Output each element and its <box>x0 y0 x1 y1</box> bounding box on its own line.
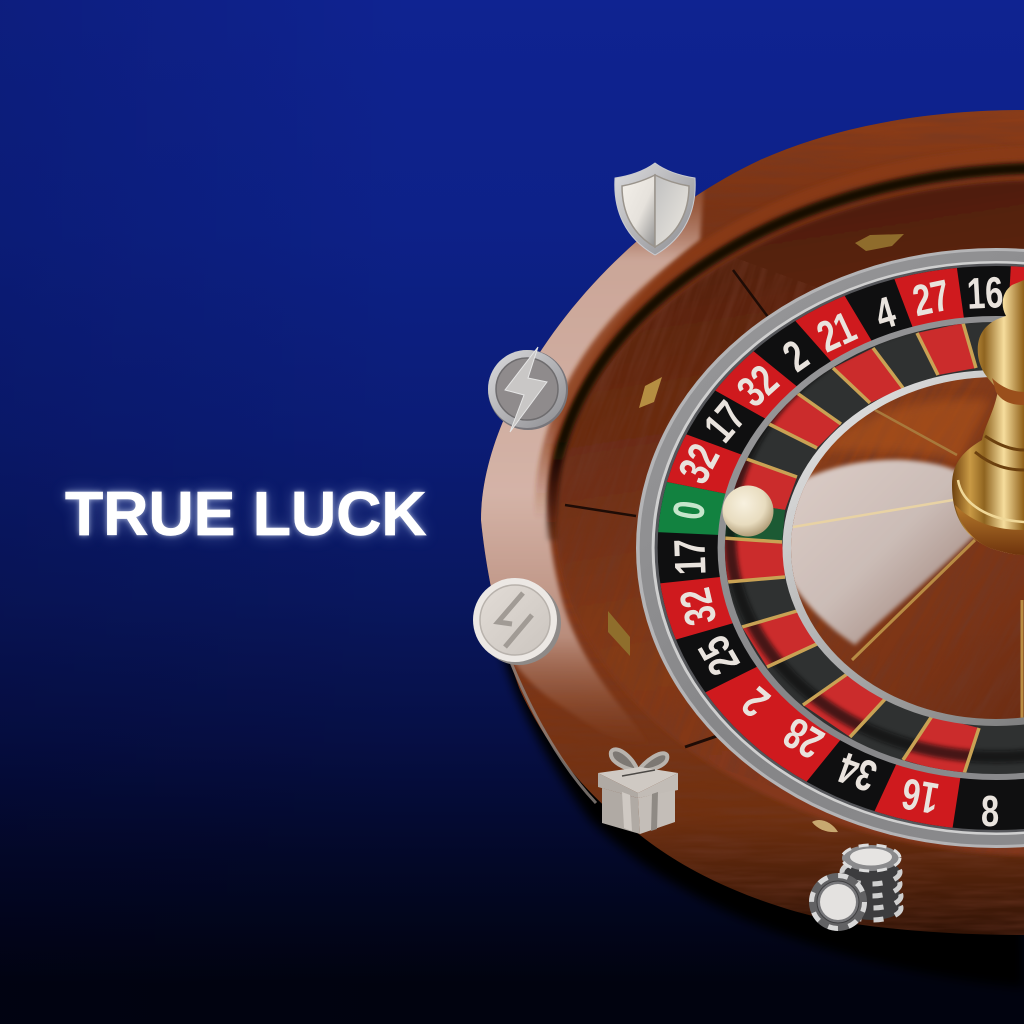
title: TRUE LUCK <box>65 479 427 549</box>
icon: shield <box>615 163 695 255</box>
lower silver edge line <box>508 655 596 803</box>
spindle base <box>955 505 1024 555</box>
rim pale reflection <box>476 170 705 745</box>
hub wood <box>791 377 1024 719</box>
outer wooden rim <box>481 110 1024 935</box>
pocket numbers: 0 <box>664 498 715 523</box>
pocket numbers <box>664 268 1004 836</box>
pocket numbers: 21 <box>810 303 863 362</box>
gold diamond left upper <box>639 377 662 408</box>
spindle collar band <box>992 378 1024 405</box>
front chip <box>809 873 867 931</box>
gold diamond left lower <box>608 611 630 656</box>
gift lid <box>598 767 678 793</box>
spindle body <box>952 280 1024 555</box>
pocket numbers: 2 <box>734 677 779 726</box>
bowl seam bottom <box>685 735 720 747</box>
pocket shadow <box>730 313 1024 757</box>
gold diamond bottom <box>812 820 838 832</box>
pocket numbers: 16 <box>966 268 1004 319</box>
icon: lightning badge <box>488 347 568 432</box>
number band sectors <box>658 266 1024 828</box>
pocket numbers: 34 <box>832 742 883 800</box>
pocket numbers: 32 <box>671 583 727 630</box>
orange rim band <box>541 152 1024 520</box>
pocket numbers: 16 <box>898 768 942 822</box>
pocket numbers: 32 <box>728 356 788 417</box>
pocket numbers: 4 <box>870 288 902 340</box>
pocket numbers: 27 <box>909 271 954 326</box>
hub upper glow <box>820 399 990 460</box>
bowl seam left <box>565 505 636 516</box>
green pocket <box>725 508 785 540</box>
icon: chip stack <box>809 845 901 931</box>
pocket numbers: 28 <box>776 707 832 768</box>
gift ribbon <box>622 792 632 831</box>
golden spindle <box>952 280 1024 555</box>
inner silver ring of band <box>718 316 1024 780</box>
wooden bowl <box>556 180 1024 856</box>
gift body <box>602 788 640 834</box>
gold diamond top <box>855 234 904 251</box>
icon: coin <box>473 578 561 665</box>
pocket numbers: 32 <box>669 436 730 491</box>
gift bow <box>611 749 667 771</box>
red pockets <box>722 323 979 777</box>
bowl wood grain <box>594 261 804 788</box>
hub wood grain <box>793 377 1024 710</box>
spindle flange highlight <box>958 480 1024 522</box>
inner silver rim <box>782 370 1024 726</box>
pockets <box>722 313 1024 777</box>
stack layers <box>842 845 901 920</box>
pocket base <box>725 322 1024 774</box>
pocket numbers: 17 <box>666 538 716 576</box>
silver ring <box>636 248 1024 848</box>
hub gold spokes <box>793 500 953 527</box>
icon: gift box <box>598 749 678 834</box>
hub reflection <box>785 460 975 645</box>
pocket numbers: 17 <box>695 393 756 452</box>
bowl seam top <box>733 270 768 317</box>
hub details <box>791 377 1024 718</box>
rim wood grain <box>562 110 1024 935</box>
silver outer ring and number band <box>636 248 1024 848</box>
ball <box>722 486 774 536</box>
pocket numbers: 25 <box>689 627 750 683</box>
number band base <box>658 266 1024 830</box>
black groove <box>551 168 1024 540</box>
pocket numbers: 8 <box>981 787 999 836</box>
gold frets <box>723 323 979 777</box>
roulette wheel <box>481 110 1024 986</box>
wheel underside shadow <box>488 500 1024 988</box>
pocket numbers: 2 <box>775 331 817 382</box>
spindle dark rings <box>975 436 1024 470</box>
